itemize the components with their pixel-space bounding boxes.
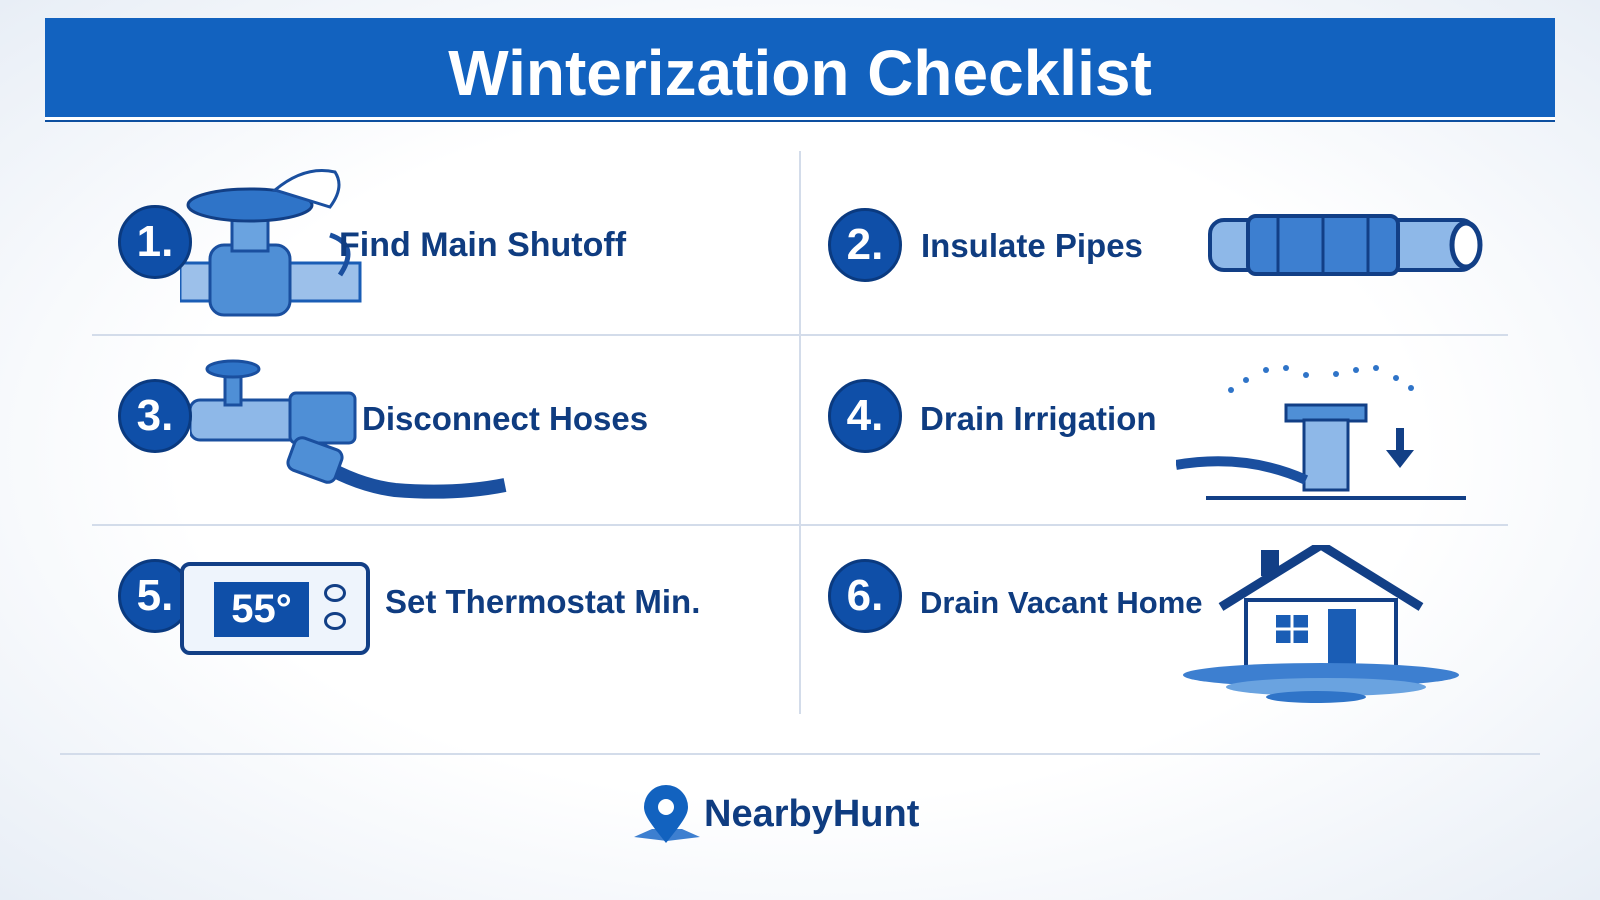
icon: thermostat (180, 562, 370, 655)
icon: insulated pipe (1208, 214, 1482, 276)
item 3 (118, 360, 648, 499)
number 3 (118, 379, 192, 453)
icon: faucet and hose (190, 360, 506, 499)
item 2 (828, 208, 1482, 282)
title bar (45, 18, 1555, 122)
label: Drain Irrigation (920, 400, 1157, 437)
icon: shutoff valve (180, 169, 362, 316)
number 6 (828, 559, 902, 633)
icon: thermostat: 55° (231, 587, 292, 631)
icon: house with water (1183, 545, 1459, 703)
label: Disconnect Hoses (362, 400, 648, 437)
icon: sprinkler (1176, 365, 1466, 500)
label: Find Main Shutoff (339, 226, 626, 264)
number 5 (118, 559, 192, 633)
number 4: 4. (847, 391, 883, 440)
number 4 (828, 379, 902, 453)
number 5: 5. (137, 571, 173, 620)
label: Set Thermostat Min. (385, 583, 700, 620)
item 6 (828, 545, 1459, 703)
number 1: 1. (137, 217, 173, 266)
number 2: 2. (847, 220, 883, 269)
number 6: 6. (847, 571, 883, 620)
logo (634, 785, 919, 843)
brand name: NearbyHunt (704, 793, 919, 835)
item 4 (828, 365, 1466, 500)
item 5 (118, 559, 700, 655)
label: Insulate Pipes (921, 227, 1143, 264)
number 1 (118, 205, 192, 279)
number 3: 3. (137, 391, 173, 440)
label: Drain Vacant Home (920, 585, 1203, 620)
icon: location pin (634, 785, 700, 843)
number 2 (828, 208, 902, 282)
title: Winterization Checklist (448, 37, 1152, 109)
item 1 (118, 169, 626, 316)
